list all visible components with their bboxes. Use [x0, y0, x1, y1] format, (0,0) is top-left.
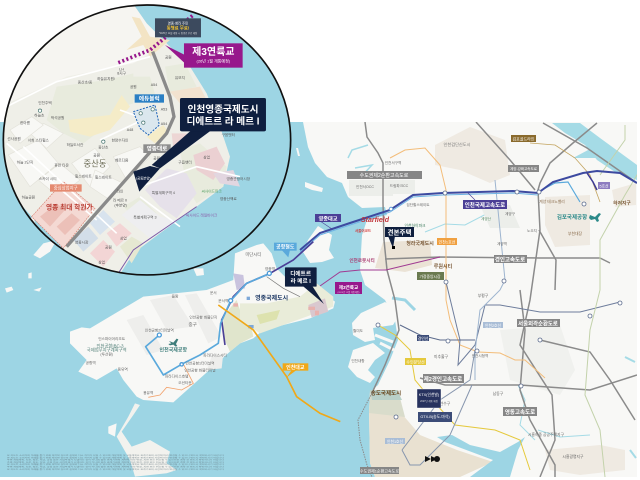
- label: 가정중앙시장: 가정중앙시장: [420, 274, 441, 279]
- text: inset small labels: 공원: [105, 244, 112, 249]
- text: inset small labels: 영종관광어시장: [227, 176, 251, 181]
- callout: 제3연륙교: 제3연륙교: [192, 45, 234, 58]
- callout: 인천영종국제도시 디에트르 라 메르 I: 디에트르 라 메르 I: [187, 115, 260, 127]
- text: mainland place names: 계양구: [505, 211, 516, 216]
- expressways: [358, 122, 637, 477]
- text: mainland place names: 계양 테크노밸리: [539, 199, 565, 204]
- Yeongjong island and airport: [5, 240, 340, 477]
- callout: 제3연륙교: (26년 1월 개통예정): [197, 58, 231, 64]
- text: mainland place names: 인천서구역: [385, 160, 401, 165]
- callout: 제3연륙교: [335, 282, 362, 294]
- inset land: [0, 0, 230, 277]
- text: inset small labels: 씨사이드 레일바이크: [186, 213, 218, 218]
- text: island labels: 인천공항IBC-3: [96, 342, 124, 348]
- label: 서울외곽순환도로: 서울외곽순환도로: [518, 320, 558, 328]
- callout: 인천영종국제도시 디에트르 라 메르 I: [152, 98, 266, 168]
- Gimpo airport connector: [538, 182, 580, 202]
- text: island labels: 영종역: [265, 266, 275, 271]
- line: small road: [267, 277, 300, 297]
- label: 수도권제2순환고속도로: [347, 171, 422, 179]
- fine print disclaimer: 본 지도는 소비자의 이해를 돕기 위해 제작된 것으로 실제와 다소 차이가 있을 수 있으며 개발계획 및 교통계획은 관계기관의 사정에 따라 변경될 수 있으니 반드시 확인하시기 바랍니다: [7, 462, 224, 466]
- sea channel south: [437, 435, 525, 477]
- text: mainland place names: 드림파크CC: [390, 183, 409, 188]
- text: inset small labels: 상업: [120, 235, 127, 240]
- label: 인천2호선: [483, 322, 503, 328]
- residential cluster: [68, 95, 168, 143]
- text: inset small labels: 휴먼 타운: [54, 163, 70, 168]
- label: GTX-B: GTX-B(송도-마석): [420, 414, 450, 419]
- label: 제2경인: 계양-강화고속도로: [510, 166, 538, 171]
- text: island labels: 을왕: [172, 293, 179, 298]
- text: island labels: 용유역: [118, 367, 128, 372]
- Cheongna beige zone: [375, 240, 432, 272]
- callout: 인천영종국제도시 디에트르 라 메르 I: 인천영종국제도시: [187, 103, 259, 115]
- upper-left pale land: [0, 0, 167, 107]
- text: highlighted place names: 송도국제도시: [371, 389, 401, 397]
- text: inset small labels: A54: [151, 83, 157, 87]
- icon: logo Songdo: [425, 456, 440, 462]
- label: 수도권제1순환고속도로: 수도권제1순환고속도로: [360, 468, 399, 474]
- station markers: [376, 190, 622, 419]
- label: 공항철도: 공항철도: [276, 244, 295, 251]
- text: inset small labels: 스카이 시티: [39, 176, 57, 181]
- callout: 디에트르 라 메르 I: [285, 267, 324, 304]
- mainland landmass: [303, 122, 640, 477]
- text: mainland place names: 미추홀구: [434, 354, 448, 359]
- academy zone: [32, 182, 95, 248]
- text: inset small labels: 영종시장: [75, 239, 89, 244]
- stations: [157, 271, 271, 366]
- text: 인천국제공항: 인천국제공항: [160, 347, 187, 354]
- text: mainland place names: 인천서OCC: [356, 184, 374, 189]
- text: inset small labels: 8지구: [117, 70, 127, 75]
- label: 김포골드라인: [511, 135, 536, 142]
- inset circle outline: [3, 5, 291, 275]
- edu block outline: [133, 105, 159, 135]
- text: mainland place names: 인천시청역: [472, 353, 488, 358]
- label: 인천1호선 south: 인천1호선: [387, 439, 404, 444]
- text: island labels: 운서: [210, 290, 217, 295]
- label: KTX: 2027년 개통 예정: [420, 399, 438, 403]
- callout: 영종-청라 무료: *2025년 12월 개통 시 통행료 무료 예정: [159, 31, 197, 35]
- label: 인천2호선: 인천2호선: [485, 323, 502, 328]
- fine print disclaimer: 본 지도는 소비자의 이해를 돕기 위해 제작된 것으로 실제와 다소 차이가 있을 수 있으며 개발계획 및 교통계획은 관계기관의 사정에 따라 변경될 수 있으니 반드시 확인하시기 바랍니다: [7, 467, 224, 471]
- label: KTX: [417, 389, 441, 408]
- text: inset small labels: 공원: [130, 84, 137, 89]
- label: 영동고속도로: [503, 407, 537, 416]
- icon: school markers: [38, 108, 154, 143]
- label: 경인고속도로: 경인고속도로: [495, 256, 525, 264]
- text: island labels: 인천공항 화물터미널: [184, 367, 216, 372]
- text: inset small labels: A54: [161, 122, 167, 126]
- text: island labels: 중구: [188, 322, 198, 328]
- text: mainland place names: 계양역: [497, 241, 507, 246]
- coloured parcels: [233, 303, 319, 315]
- text: highlighted place names: 서울어코드: [355, 228, 372, 233]
- callout: 제3연륙교: 제3연륙교: [339, 284, 359, 291]
- text: inset small labels: 라 메르 II: [113, 197, 127, 202]
- text: inset small labels: 씨사이드파크: [202, 188, 222, 193]
- callout: 영종-청라 무료: 영종·청라 주민: [168, 20, 188, 25]
- text: island labels: 인스파이어리조트: [98, 336, 126, 341]
- label: 에듀블럭: [135, 94, 164, 103]
- label: 인천1호선: 인천1호선: [439, 238, 456, 244]
- text: mainland place names: 시흥하중 공공주택지구: [528, 432, 564, 437]
- text: inset small labels: 구읍뱃터: [178, 159, 192, 164]
- text: inset small labels: 힐스테이트: [95, 174, 112, 179]
- text: inset small labels: 하늘초: [34, 113, 45, 118]
- callout: 제3연륙교: (2025년 12월 개통예정): [337, 290, 360, 294]
- label: GTX-B: [418, 412, 452, 422]
- label: 영종대로: [143, 144, 171, 153]
- text: island labels: 운서역: [218, 298, 228, 303]
- Songdo international city: [369, 390, 493, 477]
- label: 김포골드라인: 김포골드라인: [512, 136, 535, 142]
- text: island labels: 인천공항 화물단지: [189, 315, 217, 320]
- label: 수인분당선: [405, 358, 426, 365]
- small islands: [5, 240, 204, 437]
- text: inset small labels: A53: [161, 107, 167, 111]
- label: 수인분당선: 수인분당선: [406, 358, 425, 364]
- line: third connecting bridge mainland: [320, 257, 440, 286]
- island landmass: [70, 243, 335, 402]
- blocks in academy zone: [40, 203, 80, 235]
- label: 영동고속도로: 영동고속도로: [505, 408, 535, 416]
- callout: 견본주택: 견본주택: [388, 228, 411, 236]
- text: highlighted place names: 인천로봇시티: [349, 257, 375, 264]
- text: island labels: 국제업무지구계획구역: [87, 347, 127, 354]
- text: inset small labels: 공원: [93, 153, 100, 158]
- fine print disclaimer: 주변 개발계획, 도로, 철도, 학교, 공원 등은 사업주체가 시행하는 것이 아니며 향후 관계기관의 계획에 따라 변경, 지연 또는 취소될 수 있으므로 계약 전 반드시 확인하시기 바랍니다: [7, 458, 224, 462]
- label: 5호선: [598, 182, 610, 189]
- text: inset small labels: 서희 스타힐스: [28, 137, 50, 142]
- label: 인천국제고속도로: 인천국제고속도로: [465, 201, 505, 209]
- text: island labels: [86, 251, 275, 395]
- text: inset small labels: 하늘 2단지: [17, 159, 33, 164]
- text: island labels: 파라다이스호텔: [165, 373, 189, 378]
- text: mainland place names: 노오지: [527, 228, 537, 233]
- text: island labels: 용유역: [143, 390, 153, 395]
- label: 경인고속도로: [494, 255, 527, 264]
- icon: Gimpo airport plane: [589, 213, 601, 222]
- special planning zones: [122, 168, 197, 238]
- text: island labels: (투선원): [100, 352, 113, 357]
- label: 경인선: [417, 335, 429, 341]
- label: 인천대교: [283, 363, 308, 377]
- label: 인천1호선: [437, 238, 457, 245]
- label: 인천1호선 south: [385, 438, 405, 444]
- label: 서울외곽순환도로: [517, 319, 560, 328]
- text: inset small labels: 특별계획구역 4: [152, 190, 175, 195]
- text: mainland place names: 월미도: [353, 328, 364, 333]
- text: inset small labels: [7, 55, 251, 264]
- label: 영종 최대 학원가: 영종 최대 학원가: [46, 202, 93, 211]
- subway lines: [378, 125, 640, 477]
- text: inset small labels: 구읍뱃터: [222, 132, 235, 137]
- site plot: [133, 166, 160, 192]
- label: 수도권제2순환고속도로: 수도권제2순환고속도로: [360, 172, 409, 179]
- text: highlighted place names: 김포국제공항: [557, 213, 587, 221]
- text: mainland place names: 부천대장: [568, 231, 582, 236]
- golf and parks: [349, 180, 520, 228]
- fine print disclaimer: 주변 개발계획, 도로, 철도, 학교, 공원 등은 사업주체가 시행하는 것이 아니며 향후 관계기관의 계획에 따라 변경, 지연 또는 취소될 수 있으므로 계약 전 반드시 확인하시기 바랍니다: [7, 464, 224, 468]
- text: inset small labels: 한양수자인: [112, 138, 128, 143]
- road junction at bridge landing: [127, 17, 170, 57]
- text: inset small labels: 하늘도서관: [67, 142, 84, 147]
- line: Incheon Bridge: [218, 305, 340, 422]
- text: mainland place names: [351, 141, 584, 459]
- label: 경인선: 경인선: [418, 336, 429, 341]
- text: inset small labels: 특별계획구역 3: [133, 215, 157, 220]
- text: inset small labels: 박석공원: [51, 115, 64, 120]
- label: 인천국제고속도로: [463, 192, 507, 209]
- purple coastal path: [118, 207, 197, 273]
- line: Incheon International Expressway: [300, 171, 637, 252]
- text: inset small labels: 상업: [203, 154, 210, 159]
- port strips: [375, 335, 394, 350]
- text: island labels: 인천공항1터미널역: [186, 361, 214, 366]
- label: 하저지구: 하저지구: [613, 200, 631, 206]
- small island bottom left: [17, 217, 40, 257]
- text: island labels: 공항역: [86, 360, 96, 365]
- label: 5호선: 5호선: [599, 184, 609, 188]
- text: inset small labels: 유보지: [175, 75, 185, 80]
- text: inset small labels: A48: [127, 128, 133, 132]
- mainland map: [5, 122, 640, 477]
- text: highlighted place names: 루원시티: [434, 263, 453, 270]
- text: inset small labels: 힐스테이트: [75, 173, 92, 178]
- text: inset small labels: 영종산책로: [220, 196, 237, 201]
- text: 영종국제도시: 영종국제도시: [255, 294, 288, 302]
- label: 제2경인: [508, 165, 539, 172]
- callout: 디에트르 라 메르 I: 디에트르: [290, 269, 311, 277]
- inset map content: [0, 0, 300, 280]
- text: highlighted place names: 청라국제도시: [406, 240, 434, 247]
- text: island labels: 인천공항2터미널역: [145, 327, 174, 332]
- label: 중심상업지구: 중심상업지구: [54, 185, 78, 192]
- text: inset small labels: 베르디움: [115, 158, 129, 163]
- label: 공동분양: (공동분양): [136, 175, 151, 180]
- southern island: [117, 403, 177, 477]
- text: inset small labels: 하늘공원: [22, 194, 35, 199]
- text: island labels: 오션타운: [178, 380, 192, 385]
- callout: 영종-청라 무료: 통행료 무료!: [167, 25, 190, 32]
- park patches: [47, 63, 227, 220]
- lower-left blocks: [8, 117, 150, 200]
- main boulevard: [67, 52, 174, 247]
- label: 제2경인고속도로: 제2경인고속도로: [424, 375, 462, 383]
- inset road grid: [0, 57, 240, 233]
- lower colored parcels: [73, 210, 143, 267]
- district blobs: [435, 127, 636, 475]
- fine print disclaimer: 주변 개발계획, 도로, 철도, 학교, 공원 등은 사업주체가 시행하는 것이 아니며 향후 관계기관의 계획에 따라 변경, 지연 또는 취소될 수 있으므로 계약 전 반드시 확인하시기 바랍니다: [7, 460, 224, 464]
- text: 중산동: 중산동: [83, 159, 107, 169]
- text: inset small labels: 공원: [153, 155, 160, 160]
- text: mainland place names: 시흥광명지구: [563, 454, 584, 459]
- icon: airport plane: [168, 339, 178, 347]
- text: island labels: 파라다이스시티: [203, 353, 227, 358]
- text: mainland place names: 검단힐스테이트: [406, 202, 430, 207]
- Yeongjong developed areas: [223, 273, 333, 352]
- callout: 영종-청라 무료: [155, 18, 201, 37]
- label: 중심상업지구: [50, 184, 82, 192]
- fine print disclaimer: 본 지도는 소비자의 이해를 돕기 위해 제작된 것으로 실제와 다소 차이가 있을 수 있으며 개발계획 및 교통계획은 관계기관의 사정에 따라 변경될 수 있으니 반드시 확인하시기 바랍니다: [7, 455, 224, 459]
- label: KTX: KTX(인천발): [419, 392, 440, 397]
- text: inset small labels: 공원: [165, 55, 172, 60]
- label: 영종대로: 영종대로: [147, 145, 167, 153]
- text: inset small labels: (후분양): [114, 203, 127, 208]
- label: 제2경인고속도로: [423, 374, 464, 383]
- Han river and waterways: [552, 123, 637, 180]
- text: mainland place names: 인천내항: [351, 358, 365, 363]
- fine print disclaimer: [7, 453, 224, 471]
- callout: 제3연륙교: [165, 43, 243, 68]
- text: inset small labels: 한아름: [20, 120, 31, 125]
- text: inset small labels: 라인: [117, 189, 123, 194]
- label: 영종대교: 영종대교: [318, 214, 338, 222]
- reclaimed land and piers: [296, 148, 398, 383]
- text: inset small labels: 선사공원: [7, 136, 21, 141]
- text: inset small labels: 인천주택: [38, 100, 52, 105]
- text: highlighted place names: Starfield: [361, 217, 390, 224]
- label: 에듀블럭: 에듀블럭: [139, 94, 160, 102]
- text: mainland place names: 부평구: [478, 293, 489, 298]
- text: mainland place names: 인천하이파크: [405, 223, 426, 228]
- label: 인천대교: 인천대교: [286, 364, 305, 371]
- text: mainland place names: 연수구: [440, 401, 451, 406]
- fine print disclaimer: 본 지도는 소비자의 이해를 돕기 위해 제작된 것으로 실제와 다소 차이가 있을 수 있으며 개발계획 및 교통계획은 관계기관의 사정에 따라 변경될 수 있으니 반드시 확인하시기 바랍니다: [7, 453, 224, 457]
- pink resort parcels: [170, 87, 240, 187]
- text: highlighted place names: [349, 213, 587, 397]
- label: 가정중앙시장: [417, 272, 444, 280]
- text: mainland place names: 계양산: [481, 216, 492, 221]
- label: 영종대교: [315, 214, 341, 229]
- text: inset small labels: LH: [119, 68, 124, 72]
- line: resort tram orange: [148, 364, 193, 397]
- line: Yeongjong bridge to airport: [222, 242, 313, 345]
- text: inset small labels: 하늘유치원/: [97, 76, 116, 81]
- text: inset small labels: 상업: [98, 259, 105, 264]
- inset circle: Yeongjong close-up: [0, 0, 300, 280]
- text: mainland place names: 인천검단신도시: [444, 141, 471, 147]
- text: mainland place names: 남동구: [493, 391, 504, 396]
- text: island labels: 미단시티: [245, 251, 261, 258]
- third bridge dashed line: [118, 15, 193, 63]
- callout: 디에트르 라 메르 I: 라 메르 I: [290, 277, 311, 285]
- text: inset small labels: 중산초: [98, 144, 109, 149]
- airport runways: [127, 293, 223, 370]
- sea background: [0, 122, 637, 477]
- callout: 견본주택: [385, 227, 414, 249]
- label: 공항철도: [274, 243, 297, 257]
- line: airport railroad: [146, 273, 270, 375]
- text: inset small labels: 중산초/중: [78, 79, 93, 84]
